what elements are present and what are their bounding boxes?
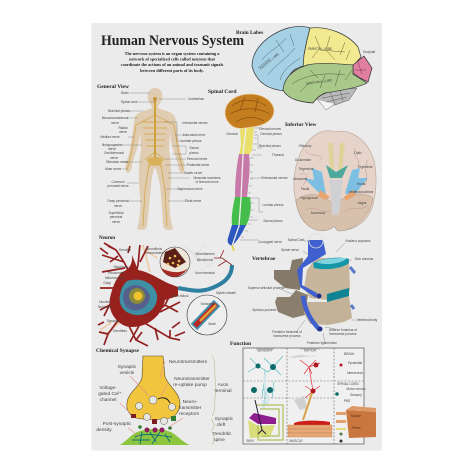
vertebrae labels: transverse process xyxy=(330,332,357,336)
orange nerve right xyxy=(344,190,356,201)
title: Human Nervous System xyxy=(101,33,244,49)
gyri lines xyxy=(300,148,368,212)
cord: thoracic xyxy=(235,154,250,198)
brain stem xyxy=(318,100,335,110)
body labels right: Saphenous nerve xyxy=(178,187,203,191)
panel: general view xyxy=(97,84,221,230)
synapse brackets xyxy=(211,356,216,445)
nucleolus xyxy=(134,292,142,300)
panel: inferior view xyxy=(285,122,376,231)
panel: spinal cord xyxy=(208,89,288,251)
right column icons xyxy=(335,364,342,442)
neuron labels: Mitochondrion xyxy=(105,276,125,280)
inferior labels: Hypoglossal xyxy=(300,196,318,200)
olive contours xyxy=(257,405,283,440)
panel: chemical synapse xyxy=(96,348,234,445)
orange cube front xyxy=(346,410,376,438)
dark nerve ending xyxy=(255,400,266,434)
body silhouette xyxy=(125,88,185,230)
inset: cytoskeleton xyxy=(160,247,190,277)
synapse labels: Neuro- xyxy=(183,399,198,405)
body labels right: Tibial nerve xyxy=(185,199,201,203)
vertebrae labels: Disc annulus xyxy=(355,257,374,261)
brain folds xyxy=(258,34,366,104)
body labels left: Brachial plexus xyxy=(108,109,130,113)
cord labels: Cervical xyxy=(226,132,238,136)
body labels left: nerve xyxy=(114,204,122,208)
function labels: Interneuron xyxy=(347,371,363,375)
inferior labels: Trigeminal xyxy=(358,165,373,169)
body labels right: Femoral nerve xyxy=(187,157,207,161)
synapse labels: Synaptic xyxy=(118,364,137,370)
synapse labels xyxy=(96,359,234,443)
synapse labels: Dendritic xyxy=(213,431,232,437)
synapse labels: Axon xyxy=(218,382,229,388)
body labels right: of femoral nerve xyxy=(195,180,219,184)
brain base xyxy=(294,131,376,231)
body labels right: Sciatic nerve xyxy=(184,171,202,175)
vertebrae labels: Posterior foramina of xyxy=(272,330,302,334)
intro text: The nervous system is an organ system containing a xyxy=(125,51,220,56)
heading: inferior view: Inferior View xyxy=(285,122,317,128)
body labels left: peroneal nerve xyxy=(107,184,129,188)
cord labels: Intercostal nerves xyxy=(262,176,288,180)
function labels: SPINAL CORD xyxy=(337,382,359,386)
receptors xyxy=(138,425,172,432)
function frame xyxy=(243,348,364,444)
intro text: between different parts of its body. xyxy=(140,68,204,73)
lobe labels: TEMPORAL LOBE xyxy=(305,78,332,86)
olfactory tracts xyxy=(328,143,345,170)
function labels: MUSCLE xyxy=(289,439,303,443)
heading: chemical synapse: Chemical Synapse xyxy=(96,348,139,354)
cord tail xyxy=(232,245,234,251)
cord labels xyxy=(226,127,288,244)
nucleus xyxy=(129,288,145,304)
cord labels: Cervical nerves xyxy=(259,127,281,131)
neuron labels: Golgi xyxy=(103,281,111,285)
cord labels: Sacral plexus xyxy=(263,219,283,223)
glia xyxy=(185,243,215,270)
cord leader lines xyxy=(240,128,263,240)
body labels left: peroneal xyxy=(110,215,122,219)
lobe labels: PARIETAL LOBE xyxy=(308,47,332,51)
vertebrae labels: Nucleus pulposus xyxy=(345,239,371,243)
neuron labels xyxy=(98,247,236,333)
function labels: Muscle xyxy=(351,414,361,418)
synapse labels: vesicle xyxy=(120,370,135,376)
body labels right: Muscular branches xyxy=(194,176,221,180)
neuron labels: Microtubule xyxy=(197,258,213,262)
synapse labels: Neurotransmitters xyxy=(169,359,208,365)
lobe labels xyxy=(259,47,332,86)
frontal lobe xyxy=(252,26,310,91)
body labels left: nerve xyxy=(119,130,127,134)
calcium channels xyxy=(131,414,157,424)
nerve roots xyxy=(241,132,257,237)
red cell bodies xyxy=(310,362,318,394)
inset: myelin xyxy=(187,295,227,335)
neuron labels: Ribosomes xyxy=(108,271,124,275)
vertebrae labels: Vertebral body xyxy=(357,318,378,322)
cerebellum lower xyxy=(296,194,373,231)
inferior labels: Optic xyxy=(354,151,362,155)
nerves xyxy=(127,100,183,226)
disc top xyxy=(316,258,347,264)
neuron labels: Schwann xyxy=(200,302,214,306)
disc lower xyxy=(327,288,349,303)
orange cube top xyxy=(346,406,376,412)
body labels right: plexus xyxy=(189,151,199,155)
inferior labels: Vagus xyxy=(358,201,367,205)
synapse labels: transmitter xyxy=(179,405,202,411)
axon terminal xyxy=(214,250,232,266)
neuron labels: Dendrites xyxy=(113,329,127,333)
panel: neuron xyxy=(98,236,236,346)
vesicles xyxy=(136,396,176,424)
function labels: SENSORY xyxy=(257,348,274,352)
poster background xyxy=(92,23,382,450)
disc xyxy=(313,258,349,269)
neuron labels: Neurofibrils xyxy=(146,247,162,251)
intro text xyxy=(121,51,224,73)
vertebrae labels: Anterior foramina of xyxy=(329,328,357,332)
cord: sacral xyxy=(228,225,246,246)
synapse labels: density xyxy=(96,427,112,433)
body labels left: Genitofemoral xyxy=(104,151,124,155)
synapse labels: Voltage- xyxy=(99,385,117,391)
inferior labels: Trigeminal xyxy=(299,167,314,171)
function labels: Fibers xyxy=(352,426,361,430)
body labels left: Iliohypogastric xyxy=(102,143,123,147)
frame dashed grid xyxy=(243,348,364,444)
sensory neurons xyxy=(248,356,283,407)
function labels: Pyramidal xyxy=(348,361,362,365)
spinal cord column xyxy=(297,240,326,298)
body labels left: Obturator nerve xyxy=(106,160,128,164)
body labels right: Cerebellum xyxy=(188,97,204,101)
function labels: SKIN xyxy=(246,439,254,443)
function labels xyxy=(246,348,366,443)
muscle end plate xyxy=(294,421,330,425)
heading: general view: General View xyxy=(97,84,129,90)
leader lines xyxy=(121,93,190,201)
body labels right: Lumbar plexus xyxy=(181,139,202,143)
body labels right: Pudendal nerve xyxy=(187,163,209,167)
occipital lobe xyxy=(353,56,372,82)
synapse labels: Post-synaptic xyxy=(103,421,132,427)
intro text: network of specialized cells called neurons that xyxy=(129,56,215,62)
body labels left: Spinal cord xyxy=(121,100,137,104)
body labels right: Sacral xyxy=(189,146,199,150)
body labels left: nerve xyxy=(112,220,120,224)
cord: lumbar xyxy=(232,197,251,226)
function labels: MOTOR xyxy=(304,348,317,352)
axon xyxy=(178,265,232,291)
axon terminal xyxy=(127,356,180,420)
spinal nerves lower xyxy=(303,296,320,330)
skin block xyxy=(249,413,276,424)
cord centre lines xyxy=(232,128,246,246)
function labels: BRAIN xyxy=(344,352,355,356)
orange nerve left xyxy=(318,190,330,200)
body labels left: Superficial xyxy=(109,211,124,215)
neuron labels: Axon hillock xyxy=(171,294,189,298)
transverse process upper xyxy=(274,258,303,290)
synapse labels: re-uptake pump xyxy=(173,382,207,388)
inferior labels: Oculomotor xyxy=(295,158,312,162)
cord labels: Cervical plexus xyxy=(260,132,282,136)
cord labels: Thoracic xyxy=(272,153,285,157)
body labels left: Common xyxy=(112,180,125,184)
panel: brain lobes xyxy=(236,26,375,110)
body labels left: Musculocutaneous xyxy=(102,116,129,120)
optic nerve xyxy=(326,165,348,178)
vertebrae labels xyxy=(248,238,378,345)
right column stripes xyxy=(336,412,346,430)
motor neurons xyxy=(300,360,320,398)
inferior labels: Facial xyxy=(357,182,366,186)
synapse labels: receptors xyxy=(179,411,200,417)
brain stem xyxy=(329,180,343,215)
neuron labels: Nucleolus xyxy=(98,305,112,309)
body labels left: Radial xyxy=(118,126,128,130)
vertebrae labels: Spinal Cord xyxy=(288,238,305,242)
panel: function xyxy=(230,341,376,444)
inferior labels xyxy=(293,144,374,215)
inferior labels: Accessory xyxy=(311,211,326,215)
heading: brain lobes: Brain Lobes xyxy=(236,30,263,36)
cord labels: Lumbar plexus xyxy=(263,203,284,207)
nerve end caps xyxy=(316,294,322,298)
neuron labels: Axon terminal xyxy=(195,271,215,275)
parietal lobe xyxy=(303,28,361,68)
top label strip xyxy=(256,348,320,350)
panel: vertebrae xyxy=(248,234,378,345)
synapse labels: Synaptic xyxy=(215,416,234,422)
synapse labels: Neurotransmitter xyxy=(174,376,210,382)
neuron labels: Nucleus xyxy=(99,300,111,304)
muscle xyxy=(288,425,332,437)
body labels left: nerve xyxy=(110,156,118,160)
synapse labels: gated Ca²⁺ xyxy=(98,391,122,397)
synapse labels: cleft xyxy=(217,422,226,428)
motor pathway shade xyxy=(290,355,316,410)
orange brain xyxy=(225,94,274,128)
neuron labels: Nissl body xyxy=(114,265,129,269)
vertebrae labels: Spinous process xyxy=(252,308,276,312)
inferior labels: Facial xyxy=(301,187,310,191)
intro text: coordinate the actions of an animal and transmit signals xyxy=(121,62,224,67)
neuron labels: Dendrite xyxy=(119,248,131,252)
body labels left: Deep peroneal xyxy=(108,199,129,203)
function labels: Sensory xyxy=(350,393,362,397)
body labels left xyxy=(100,91,137,224)
cerebellum xyxy=(315,88,357,105)
vertebral body lower xyxy=(304,296,352,325)
transverse process lower xyxy=(275,290,308,318)
neuron labels: Synapse xyxy=(107,319,119,323)
body labels right xyxy=(178,97,221,203)
re-uptake arrow xyxy=(158,398,170,403)
inferior labels: Abducens xyxy=(293,177,307,181)
dendrites xyxy=(98,243,185,346)
myelinating cream processes xyxy=(100,245,157,335)
body labels left: Brain xyxy=(121,91,129,95)
body labels right: Intercostal nerves xyxy=(182,121,208,125)
vertebrae labels: Spinal nerve xyxy=(281,248,299,252)
neuron labels: Node xyxy=(208,322,216,326)
heading: function: Function xyxy=(230,341,251,347)
synapse labels: spine xyxy=(213,437,225,443)
cord labels: Coccygeal nerve xyxy=(258,240,282,244)
cord: cervical xyxy=(239,127,254,155)
dendritic spine xyxy=(120,429,190,445)
heading: spinal cord: Spinal Cord xyxy=(208,89,237,95)
teal cell bodies xyxy=(251,364,276,393)
temporal lobe xyxy=(283,63,367,103)
neuron labels: Myelin sheath xyxy=(216,291,236,295)
post-synaptic density xyxy=(132,432,172,444)
cerebrum dot xyxy=(153,97,157,101)
vertebral body upper xyxy=(304,258,350,300)
cord labels: Brachial plexus xyxy=(259,144,281,148)
blue temporal right xyxy=(345,168,368,198)
vertebrae leaders xyxy=(275,241,356,342)
inferior labels: Olfactory xyxy=(299,144,312,148)
body labels left: Ulnar nerve xyxy=(105,167,121,171)
heading: vertebrae: Vertebrae xyxy=(252,256,276,262)
synapse leader lines xyxy=(120,361,183,437)
spinal nerve right xyxy=(350,267,355,309)
neuron labels: Neurotubules xyxy=(145,251,164,255)
re-uptake pump xyxy=(171,416,176,421)
lobe labels: FRONTAL LOBE xyxy=(259,52,280,70)
vertebrae labels: Posterior ligamentum xyxy=(307,341,337,345)
function labels: PNS xyxy=(344,399,350,403)
vertebrae labels: transverse process xyxy=(274,334,301,338)
function labels: Motor neuron xyxy=(347,387,366,391)
skin yellow xyxy=(248,420,275,438)
heading: neuron: Neuron xyxy=(99,236,115,241)
synapse labels: terminal xyxy=(214,388,232,394)
body labels left: nerve xyxy=(111,121,119,125)
body labels right: Subcostal nerve xyxy=(183,133,206,137)
motor axon xyxy=(303,393,312,420)
body labels left: Median nerve xyxy=(100,135,120,139)
occipital label: Occipital xyxy=(363,50,375,54)
cell nucleus zone xyxy=(120,280,157,315)
body labels left: nerve xyxy=(108,147,116,151)
synapse labels: channel xyxy=(100,397,116,403)
dendrite thick bases xyxy=(110,255,178,327)
inferior labels: Vestibulocochlear xyxy=(349,190,374,194)
organelles xyxy=(123,285,150,310)
vertebrae labels: Superior articular process xyxy=(248,286,285,290)
neuron labels: Microfilament xyxy=(196,252,215,256)
blue temporal left xyxy=(304,168,326,195)
